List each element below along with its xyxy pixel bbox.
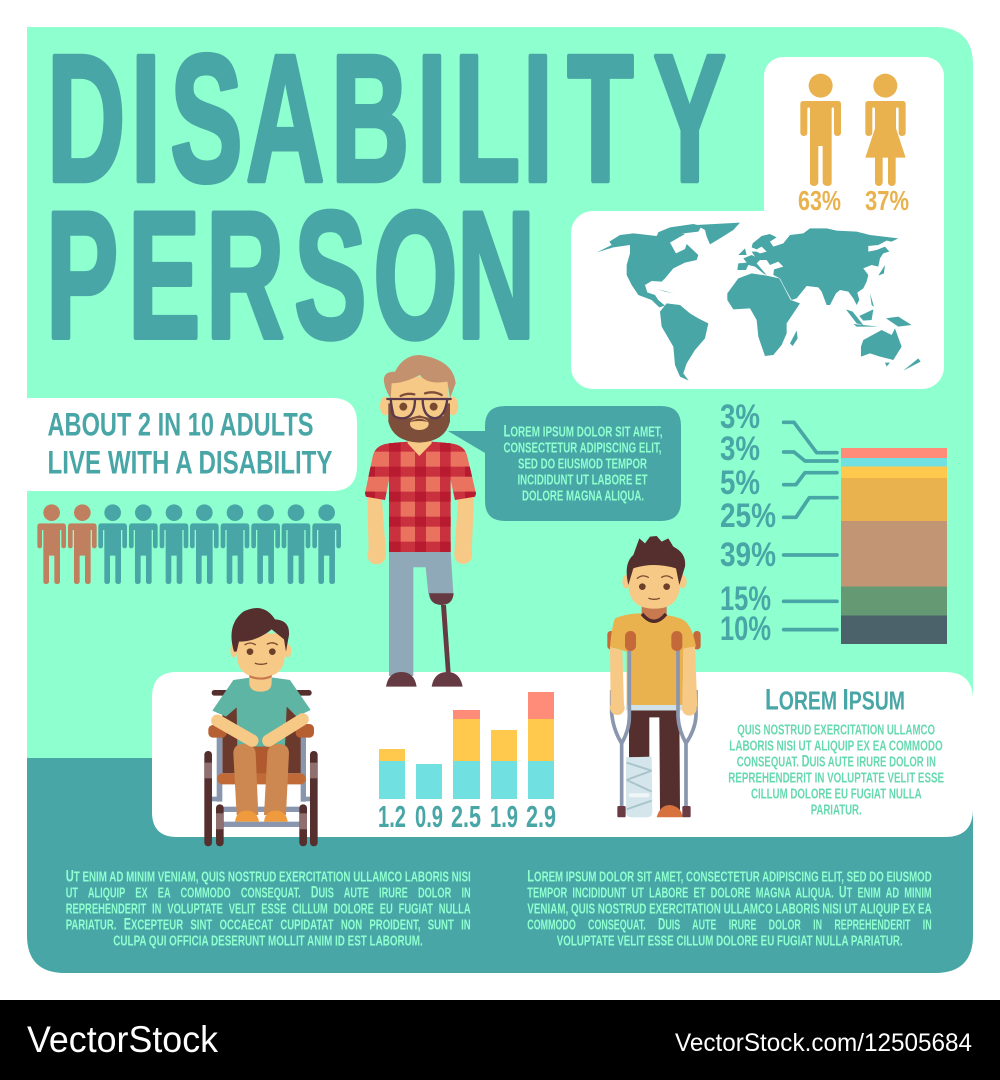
waist belt bbox=[626, 705, 683, 710]
panel: world map bbox=[571, 211, 944, 389]
footer logo: VectorStock bbox=[27, 1019, 218, 1060]
title bbox=[46, 17, 726, 376]
percentage labels: 3% bbox=[720, 398, 760, 436]
speech bubble: CONSECTETUR ADIPISCING ELIT, bbox=[504, 441, 662, 457]
panel: gender statistics bbox=[764, 57, 944, 257]
text block: bottom right: TEMPOR INCIDIDUNT UT LABORE ET DOLORE MAGNA ALIQUA. UT ENIM AD MINIM bbox=[527, 884, 932, 902]
segment: 3% salmon bbox=[841, 448, 947, 458]
speech bubble: DOLORE MAGNA ALIQUA. bbox=[522, 488, 644, 504]
bar 2.5 bbox=[453, 710, 480, 799]
neck bbox=[249, 672, 272, 692]
body copy bbox=[728, 722, 944, 818]
percentage labels: 15% bbox=[720, 580, 771, 618]
leg cast bbox=[626, 757, 652, 817]
bar chart bbox=[378, 692, 556, 834]
trousers bbox=[389, 552, 453, 676]
title: PERSON bbox=[46, 174, 535, 376]
footer image id: VectorStock.com/12505684 bbox=[675, 1029, 972, 1057]
character: man with prosthetic leg bbox=[360, 355, 480, 687]
pictogram row: 2 of 10 people bbox=[37, 504, 341, 584]
text block: bottom right bbox=[527, 868, 932, 950]
bar values: 0.9 bbox=[415, 799, 443, 834]
callout: about 2 in 10 adults bbox=[27, 398, 357, 491]
segment: 25% amber bbox=[841, 478, 947, 521]
body copy: CONSEQUAT. DUIS AUTE IRURE DOLOR IN bbox=[737, 752, 936, 770]
callout: about 2 in 10 adults: ABOUT 2 IN 10 ADULTS bbox=[48, 407, 314, 443]
text block: bottom left: UT ENIM AD MINIM VENIAM, QUIS NOSTRUD EXERCITATION ULLAMCO LABORIS NISI bbox=[66, 868, 471, 886]
percentage labels: 10% bbox=[720, 610, 771, 648]
wheelchair bbox=[204, 690, 318, 846]
crutches bbox=[612, 650, 696, 807]
bar values bbox=[378, 799, 556, 834]
panel: white strip behind characters bbox=[152, 672, 973, 837]
text block: bottom left: CULPA QUI OFFICIA DESERUNT MOLLIT ANIM ID EST LABORUM. bbox=[113, 934, 423, 950]
segment: 39% tan bbox=[841, 521, 947, 586]
speech bubble bbox=[448, 406, 681, 521]
male percentage: 63% bbox=[798, 185, 841, 216]
world map bbox=[597, 223, 921, 381]
percentage labels bbox=[720, 398, 776, 648]
text block: bottom left: PARIATUR. EXCEPTEUR SINT OCCAECAT CUPIDATAT NON PROIDENT, SUNT IN bbox=[66, 916, 471, 934]
character: boy on crutches bbox=[607, 536, 701, 817]
arms bbox=[367, 497, 474, 564]
head bbox=[230, 608, 291, 680]
lower teal band bbox=[27, 758, 973, 973]
character: boy in wheelchair bbox=[204, 608, 318, 846]
footer bar bbox=[0, 1000, 1000, 1080]
crutch pads and tips bbox=[617, 631, 691, 817]
neck and collar bbox=[642, 605, 667, 621]
text block: bottom left: UT ALIQUIP EX EA COMMODO CONSEQUAT. DUIS AUTE IRURE DOLOR IN bbox=[66, 884, 471, 902]
segment: 10% slate bbox=[841, 616, 947, 644]
bar values: 1.2 bbox=[378, 799, 406, 834]
prosthetic leg bbox=[429, 593, 463, 687]
bar values: 2.5 bbox=[451, 799, 481, 834]
shoe bbox=[657, 805, 683, 817]
body copy: PARIATUR. bbox=[811, 802, 862, 818]
head bbox=[380, 355, 458, 443]
text block: Lorem Ipsum bbox=[728, 683, 944, 818]
head bbox=[622, 536, 687, 609]
icon: male figure bbox=[800, 74, 841, 186]
icon: female figure bbox=[865, 74, 906, 186]
body copy: CILLUM DOLORE EU FUGIAT NULLA bbox=[751, 786, 922, 802]
callout: about 2 in 10 adults: LIVE WITH A DISABILITY bbox=[48, 445, 332, 481]
plaid shirt bbox=[360, 440, 480, 553]
bar 1.9 bbox=[491, 730, 517, 799]
bar 0.9 bbox=[416, 764, 442, 799]
shirt bbox=[212, 678, 311, 747]
percentage labels: 39% bbox=[720, 536, 776, 574]
shirt bbox=[610, 613, 696, 705]
female percentage: 37% bbox=[865, 185, 909, 216]
stacked bar chart bbox=[720, 398, 947, 648]
segment: 15% green bbox=[841, 586, 947, 616]
segment: 5% yellow bbox=[841, 466, 947, 478]
percentage labels: 3% bbox=[720, 430, 760, 468]
percentage labels: 25% bbox=[720, 497, 776, 535]
trousers bbox=[629, 710, 680, 810]
bar values: 2.9 bbox=[526, 799, 556, 834]
text block: bottom left: REPREHENDERIT IN VOLUPTATE VELIT ESSE CILLUM DOLORE EU FUGIAT NULLA bbox=[66, 902, 471, 918]
shoes bbox=[235, 811, 288, 822]
speech bubble: INCIDIDUNT UT LABORE ET bbox=[518, 472, 648, 488]
neck bbox=[408, 440, 432, 456]
text block: bottom left bbox=[66, 868, 471, 950]
bar 2.9 bbox=[528, 692, 554, 799]
back crutch pads bbox=[607, 631, 701, 649]
segment: 3% cyan bbox=[841, 458, 947, 466]
bar 1.2 bbox=[379, 749, 405, 799]
connector lines bbox=[784, 422, 837, 630]
heading: LOREM IPSUM bbox=[765, 683, 905, 716]
bar values: 1.9 bbox=[490, 799, 518, 834]
percentage labels: 5% bbox=[720, 464, 760, 502]
title: DISABILITY bbox=[47, 17, 726, 220]
arms bbox=[610, 647, 697, 716]
speech bubble: LOREM IPSUM DOLOR SIT AMET, bbox=[504, 423, 662, 441]
speech bubble: SED DO EIUSMOD TEMPOR bbox=[518, 456, 647, 472]
arms bbox=[217, 719, 303, 741]
shoe bbox=[386, 672, 417, 687]
legs bbox=[233, 744, 289, 815]
